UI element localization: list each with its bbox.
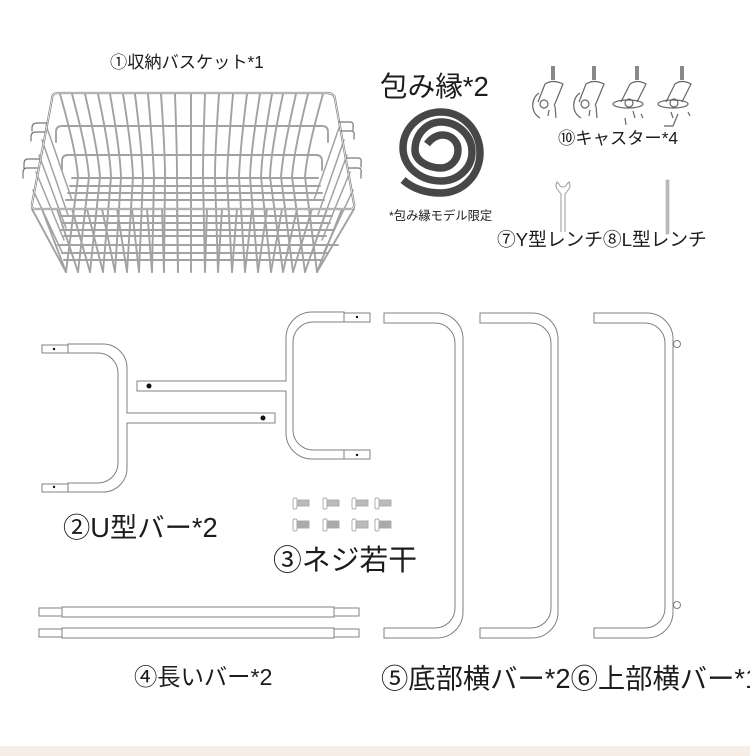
label: screws: ③ネジ若干 <box>273 545 417 577</box>
icon: right U bar <box>137 312 370 459</box>
icon: wire storage basket <box>23 93 361 272</box>
caster 3 <box>613 66 646 125</box>
icon: left U bar <box>42 344 275 492</box>
caster 2 <box>574 66 604 118</box>
label: cross bars: ⑤底部横バー*2⑥上部横バー*1 <box>381 663 750 694</box>
label: U bars: ②U型バー*2 <box>63 512 218 543</box>
icon: L wrench <box>666 180 669 234</box>
label: casters: ⑩キャスター*4 <box>558 128 678 148</box>
icon: coiled edge trim <box>403 112 480 193</box>
note: edge trim model only: *包み縁モデル限定 <box>389 208 492 223</box>
icon: long bars <box>39 607 359 638</box>
basket hooks <box>23 122 361 178</box>
caster 1 <box>533 66 563 118</box>
label: storage basket: ①収納バスケット*1 <box>110 52 264 72</box>
label: long bars: ④長いバー*2 <box>134 664 273 690</box>
label: wrenches: ⑦Y型レンチ⑧L型レンチ <box>497 229 707 250</box>
icon: Y wrench <box>556 182 570 232</box>
icon: screws <box>293 498 391 531</box>
label: edge trim: 包み縁*2 <box>380 71 489 102</box>
icon: top cross bar <box>594 313 680 638</box>
icon: casters <box>533 66 691 126</box>
bottom strip <box>0 746 750 756</box>
basket rim <box>32 93 354 209</box>
icon: bottom cross bar 2 <box>480 313 558 638</box>
icon: bottom cross bar 1 <box>384 313 463 638</box>
caster 4 <box>658 66 691 126</box>
